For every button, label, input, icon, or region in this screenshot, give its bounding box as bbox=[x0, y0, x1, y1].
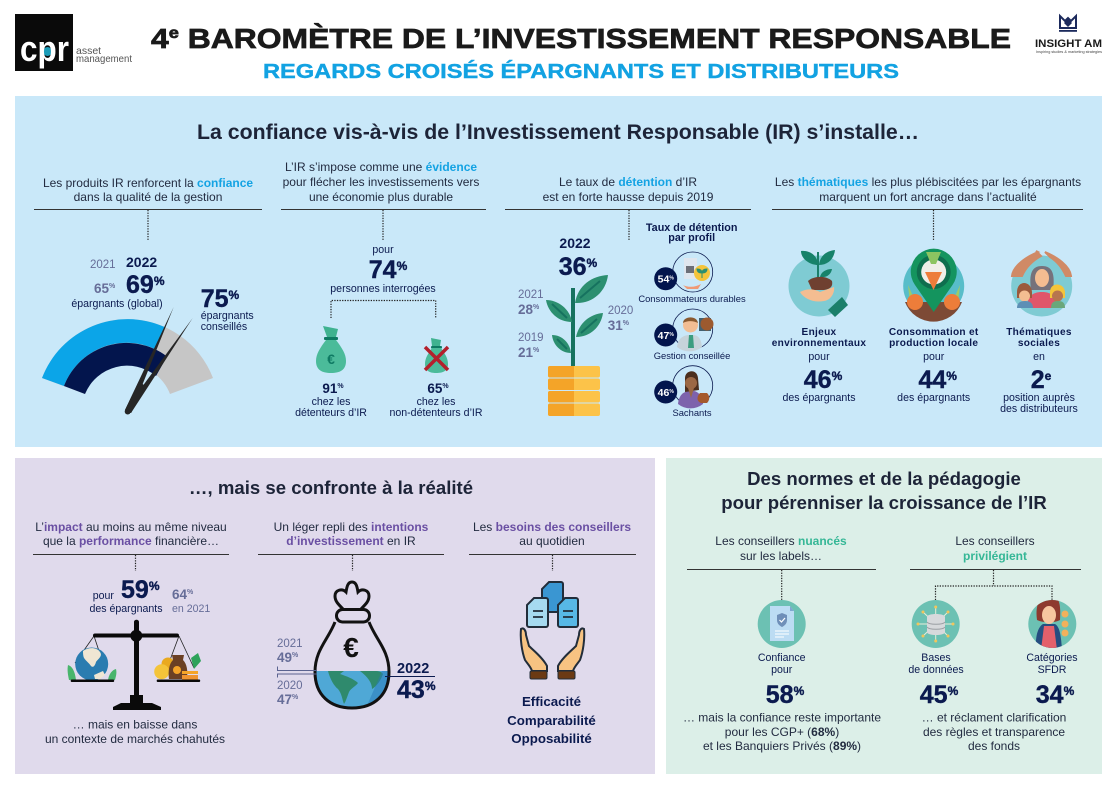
figure: local production: % bbox=[946, 369, 957, 383]
text: clarification: des règles et transparence bbox=[923, 725, 1065, 739]
figure: investment intentions: 2020 bbox=[277, 680, 303, 692]
column 3 heading: est en forte hausse depuis 2019 bbox=[543, 190, 714, 204]
logo: cpr asset management: management bbox=[76, 53, 132, 65]
profile: sustainable consumers bbox=[638, 252, 746, 304]
figure: investment intentions: 2022 bbox=[397, 661, 429, 677]
figure: social themes: en bbox=[1033, 351, 1045, 363]
figure: environmental issues bbox=[772, 327, 866, 404]
column heading: advisers' needs: au quotidien bbox=[519, 534, 585, 548]
profile: advised management bbox=[654, 309, 730, 361]
icon: money bag with euro: € bbox=[327, 351, 335, 367]
column 3 heading bbox=[505, 175, 751, 241]
figure: investment intentions bbox=[277, 638, 436, 707]
figure: investment intentions: % bbox=[292, 694, 299, 701]
figure: 74 percent bbox=[330, 244, 436, 318]
column 2 heading: une économie plus durable bbox=[309, 190, 453, 204]
figure: databases and SFDR: Catégories bbox=[1026, 652, 1078, 664]
figure: local production: pour bbox=[923, 351, 945, 363]
gauge figures: 2022 bbox=[126, 254, 157, 270]
column 4 heading: Les thématiques les plus plébiscitées par les épargnants bbox=[775, 175, 1081, 189]
figure: 59 percent: des épargnants bbox=[89, 603, 163, 615]
figure: environmental issues: 46 bbox=[804, 366, 832, 394]
column heading: intentions: d’investissement en IR bbox=[286, 534, 416, 548]
figure: databases and SFDR: 34 bbox=[1036, 681, 1064, 709]
profile: advised management: % bbox=[669, 332, 674, 338]
text: declining: un contexte de marchés chahutés bbox=[45, 732, 225, 746]
profile: knowledgeable investors: 46 bbox=[658, 387, 669, 399]
text: clarification bbox=[922, 710, 1066, 753]
column 1 heading: Les produits IR renforcent la confiance bbox=[43, 176, 253, 190]
list: advisers' needs: Opposabilité bbox=[511, 731, 592, 746]
gauge figures: % bbox=[109, 283, 116, 290]
column heading: labels: Les conseillers nuancés bbox=[715, 534, 847, 548]
figure: holding rate by year: 31 bbox=[608, 318, 623, 333]
gauge figures: 75 bbox=[201, 285, 229, 313]
figure: databases and SFDR: % bbox=[1064, 684, 1075, 698]
figure: databases and SFDR: % bbox=[948, 684, 959, 698]
text: clarification: … et réclament clarification bbox=[922, 710, 1066, 724]
column heading: advisers' needs: Les besoins des conseillers bbox=[473, 520, 631, 534]
profile: sustainable consumers: % bbox=[669, 276, 674, 282]
figure: investment intentions: 47 bbox=[277, 692, 292, 707]
figure: trust: … mais la confiance reste importante bbox=[683, 710, 881, 724]
profile: knowledgeable investors: % bbox=[669, 389, 674, 395]
figure: trust: % bbox=[794, 684, 805, 698]
figure: local production: production locale bbox=[889, 338, 978, 349]
figure: savers breakdown: non-détenteurs d’IR bbox=[389, 407, 483, 419]
title: BAROMÈTRE DE L’INVESTISSEMENT RESPONSABLE bbox=[179, 23, 1011, 54]
figure: holding rate by year: 2020 bbox=[608, 305, 633, 317]
profile: sustainable consumers: 54 bbox=[658, 274, 669, 286]
column 1 heading bbox=[34, 176, 262, 241]
figure: investment intentions: % bbox=[425, 679, 436, 693]
figure: environmental issues: environnementaux bbox=[772, 338, 866, 349]
column heading: labels: sur les labels… bbox=[740, 549, 822, 563]
column 3 heading: Le taux de détention d’IR bbox=[559, 175, 697, 189]
figure: savers breakdown: détenteurs d’IR bbox=[295, 407, 367, 419]
figure: local production: Consommation et bbox=[889, 327, 979, 338]
column heading: preferences: Les conseillers bbox=[955, 534, 1035, 548]
figure: 74 percent: pour bbox=[372, 244, 394, 256]
figure: environmental issues: % bbox=[832, 369, 843, 383]
figure: holding rate by year: 2019 bbox=[518, 332, 544, 344]
figure: holding rate by year: 28 bbox=[518, 302, 533, 317]
figure: 59 percent: % bbox=[187, 589, 194, 596]
figure: environmental issues: Enjeux bbox=[802, 327, 837, 338]
column 4 heading: marquent un fort ancrage dans l’actualité bbox=[819, 190, 1037, 204]
panel: confidence bbox=[15, 96, 1102, 447]
figure: social themes: e bbox=[1045, 369, 1052, 383]
figure: social themes: Thématiques bbox=[1006, 327, 1072, 338]
figure: local production: des épargnants bbox=[897, 392, 970, 404]
icon: hands holding documents bbox=[521, 582, 584, 679]
figure: trust: Confiance bbox=[758, 652, 806, 664]
gauge figures bbox=[71, 254, 254, 333]
title: e bbox=[169, 25, 179, 42]
figure: databases and SFDR: 45 bbox=[920, 681, 948, 709]
figure: trust: pour bbox=[771, 664, 793, 676]
icon: money bag with euro bbox=[316, 326, 346, 373]
figure: investment intentions: % bbox=[292, 652, 299, 659]
icon: local carrot map pin bbox=[903, 249, 964, 322]
figure: social themes bbox=[1000, 327, 1078, 415]
title: 4 bbox=[151, 23, 167, 54]
figure: holding rate by year: % bbox=[623, 320, 630, 327]
figure: environmental issues: pour bbox=[808, 351, 830, 363]
figure: savers breakdown: chez les bbox=[312, 396, 350, 408]
heading: rate by profile: par profil bbox=[668, 232, 715, 244]
profile: advised management: 47 bbox=[658, 330, 669, 342]
text: clarification: des fonds bbox=[968, 739, 1020, 753]
list: advisers' needs: Comparabilité bbox=[507, 713, 596, 728]
gauge figures: % bbox=[229, 288, 240, 302]
column heading: preferences: privilégient bbox=[963, 549, 1027, 563]
figure: trust: pour les CGP+ (68%) bbox=[725, 725, 839, 739]
figure: databases and SFDR: SFDR bbox=[1038, 664, 1067, 676]
icon: SFDR categories bbox=[1028, 600, 1076, 648]
column heading: impact bbox=[33, 520, 229, 571]
gauge chart bbox=[42, 307, 213, 414]
icon: money bag filled with earth bbox=[310, 582, 394, 711]
column 2 heading bbox=[281, 160, 486, 241]
icon: family under protective hands bbox=[1011, 251, 1072, 316]
gauge figures: % bbox=[154, 274, 165, 288]
icon: growing plant on coins bbox=[546, 275, 608, 416]
profile: knowledgeable investors: Sachants bbox=[672, 407, 712, 418]
heading: standards: pour pérenniser la croissance de l’IR bbox=[721, 492, 1047, 513]
list: advisers' needs bbox=[507, 694, 596, 746]
logo: cpr asset management: asset bbox=[76, 45, 101, 57]
profile: knowledgeable investors bbox=[654, 366, 713, 418]
column 4 heading bbox=[772, 175, 1083, 241]
column heading: impact: L’impact au moins au même niveau bbox=[35, 520, 227, 534]
figure: 74 percent: personnes interrogées bbox=[330, 283, 436, 295]
figure: holding rate by year: 21 bbox=[518, 345, 533, 360]
column heading: intentions: Un léger repli des intentions bbox=[274, 520, 429, 534]
figure: 59 percent: 64 bbox=[172, 587, 187, 602]
figure: investment intentions: 2021 bbox=[277, 638, 303, 650]
figure: trust: et les Banquiers Privés (89%) bbox=[703, 739, 861, 753]
figure: savers breakdown: 91 bbox=[322, 381, 337, 396]
figure: holding rate by year: % bbox=[587, 256, 598, 270]
figure: databases and SFDR bbox=[908, 652, 1078, 709]
heading: standards bbox=[721, 468, 1047, 513]
figure: trust: 58 bbox=[766, 681, 794, 709]
column heading: labels bbox=[687, 534, 876, 600]
figure: savers breakdown: % bbox=[442, 383, 449, 390]
figure: savers breakdown: chez les bbox=[417, 396, 455, 408]
figure: databases and SFDR: de données bbox=[908, 664, 964, 676]
gauge figures: conseillés bbox=[201, 321, 247, 333]
figure: holding rate by year bbox=[518, 235, 633, 360]
panel: standards and education bbox=[666, 458, 1102, 774]
gauge figures: 65 bbox=[94, 281, 109, 296]
column 2 heading: pour flécher les investissements vers bbox=[283, 175, 479, 189]
column heading: intentions bbox=[258, 520, 444, 571]
figure: social themes: des distributeurs bbox=[1000, 403, 1078, 415]
figure: 74 percent: 74 bbox=[369, 256, 397, 284]
figure: holding rate by year: % bbox=[533, 304, 540, 311]
logo: Insight AM: INSIGHT AM bbox=[1035, 38, 1102, 50]
profile: sustainable consumers: Consommateurs durables bbox=[638, 293, 746, 304]
figure: holding rate by year: % bbox=[533, 347, 540, 354]
figure: holding rate by year: 2022 bbox=[559, 235, 591, 251]
figure: 59 percent: pour bbox=[93, 590, 114, 602]
figure: holding rate by year: 2021 bbox=[518, 289, 544, 301]
text: declining: … mais en baisse dans bbox=[73, 718, 197, 732]
icon: balance scale bbox=[68, 620, 201, 710]
figure: local production: 44 bbox=[918, 366, 946, 394]
figure: holding rate by year: 36 bbox=[559, 253, 587, 281]
logo: Insight AM: Inspiring studies & marketing strategies bbox=[1036, 50, 1102, 54]
gauge figures: épargnants bbox=[201, 310, 254, 322]
profile: advised management: Gestion conseillée bbox=[654, 350, 730, 361]
heading: confidence: La confiance vis-à-vis de l’Investissement Responsable (IR) s’installe… bbox=[197, 120, 919, 144]
logo: cpr asset management bbox=[15, 14, 132, 71]
column heading: preferences bbox=[910, 534, 1081, 600]
figure: social themes: 2 bbox=[1031, 366, 1045, 394]
figure: local production bbox=[889, 327, 979, 404]
figure: 59 percent: en 2021 bbox=[172, 603, 210, 615]
figure: 59 percent: % bbox=[149, 579, 160, 593]
figure: savers breakdown: 65 bbox=[427, 381, 442, 396]
figure: environmental issues: des épargnants bbox=[782, 392, 856, 404]
figure: social themes: sociales bbox=[1018, 338, 1060, 349]
gauge figures: 2021 bbox=[90, 259, 116, 271]
heading: reality: …, mais se confronte à la réalité bbox=[189, 477, 473, 498]
logo: cpr asset management: cpr bbox=[20, 28, 69, 69]
figure: savers breakdown: % bbox=[337, 383, 344, 390]
column 1 heading: dans la qualité de la gestion bbox=[74, 190, 222, 204]
list: advisers' needs: Efficacité bbox=[522, 694, 581, 709]
column heading: impact: que la performance financière… bbox=[43, 534, 219, 548]
icon: money bag crossed out bbox=[425, 338, 448, 373]
figure: social themes: position auprès bbox=[1003, 392, 1075, 404]
figure: 59 percent: 59 bbox=[121, 576, 149, 604]
icon: databases bbox=[912, 600, 960, 648]
column heading: advisers' needs bbox=[469, 520, 636, 571]
figure: investment intentions: 43 bbox=[397, 676, 425, 704]
figure: databases and SFDR: Bases bbox=[921, 652, 951, 664]
gauge figures: 69 bbox=[126, 271, 154, 299]
text: declining bbox=[45, 718, 225, 746]
logo: Insight AM bbox=[1035, 16, 1102, 54]
heading: rate by profile bbox=[646, 222, 737, 244]
icon: hand holding a seedling bbox=[788, 250, 850, 317]
figure: savers breakdown bbox=[295, 381, 483, 419]
heading: rate by profile: Taux de détention bbox=[646, 222, 737, 234]
column 2 heading: L’IR s’impose comme une évidence bbox=[285, 160, 477, 174]
subtitle: REGARDS CROISÉS ÉPARGNANTS ET DISTRIBUTEURS bbox=[263, 60, 899, 83]
heading: standards: Des normes et de la pédagogie bbox=[747, 468, 1021, 489]
icon: trust document bbox=[758, 600, 806, 648]
panel: reality check bbox=[15, 458, 655, 774]
figure: trust bbox=[683, 652, 881, 753]
figure: 59 percent bbox=[89, 576, 210, 615]
figure: 74 percent: % bbox=[397, 259, 408, 273]
figure: investment intentions: 49 bbox=[277, 650, 292, 665]
gauge figures: épargnants (global) bbox=[71, 298, 163, 310]
icon: money bag filled with earth: € bbox=[343, 632, 359, 663]
